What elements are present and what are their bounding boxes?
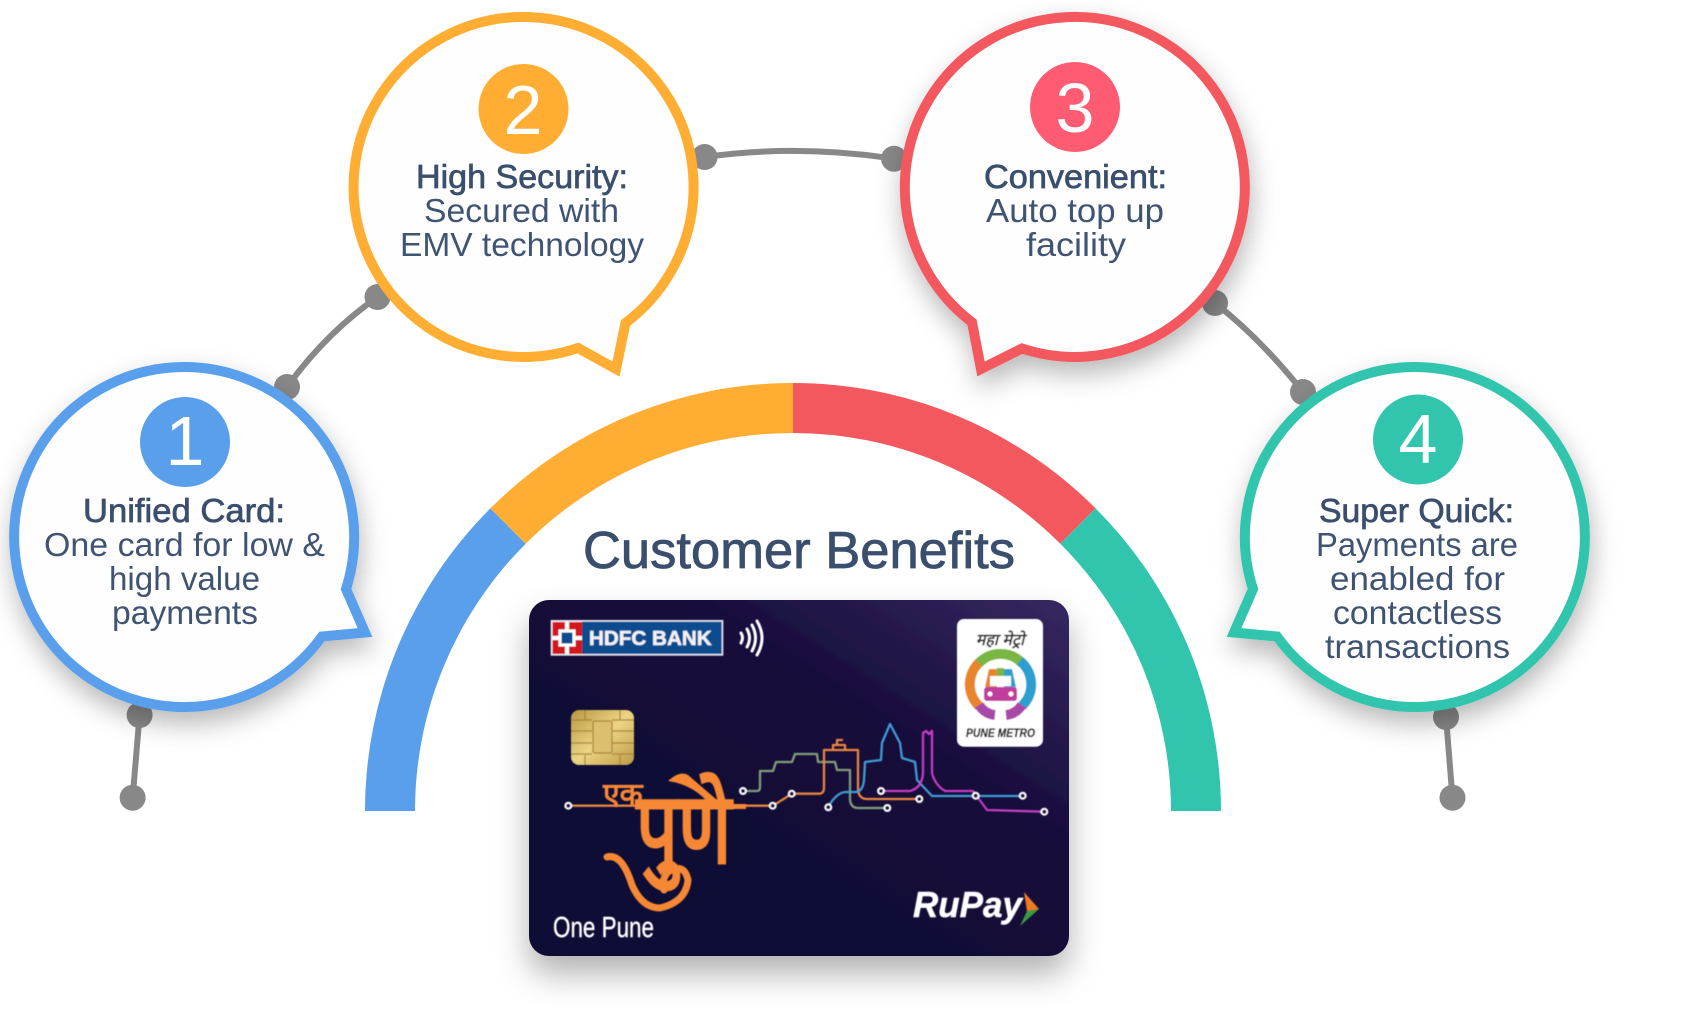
wordmark: ek pune [602,771,746,908]
panel: bubble 4 super quick: 4 [1399,400,1437,478]
metro line skyline [565,724,1047,815]
panel: bubble 1 unified card [14,367,365,707]
logo: Pune Metro tile: PUNE METRO [966,726,1036,740]
panel: bubble 3 convenient: 3 [1056,69,1094,147]
panel: bubble 1 unified card: high value [109,560,260,597]
panel: bubble 4 super quick: transactions [1325,628,1510,665]
panel: bubble 4 super quick [1234,367,1585,707]
wordmark: ek pune: एक [602,778,644,811]
logo: HDFC Bank [551,620,723,656]
icon: chip [571,710,634,765]
wordmark: ek pune: पुणे [634,771,734,891]
logo: HDFC Bank: HDFC BANK [589,628,712,650]
panel: bubble 4 super quick: Payments are [1316,526,1518,563]
semicircular four colour gauge [365,383,1221,811]
panel: bubble 4 super quick: enabled for [1330,560,1505,597]
label: One Pune: One Pune [553,912,654,944]
panel: bubble 1 unified card: One card for low & [44,526,325,563]
icon: contactless [741,621,762,655]
title: Customer Benefits [583,522,1015,580]
card: One Pune RuPay [529,600,1069,956]
panel: bubble 1 unified card: Unified Card: [83,492,285,529]
panel: bubble 4 super quick: contactless [1333,594,1502,631]
panel: bubble 3 convenient: Auto top up [986,192,1164,229]
panel: bubble 3 convenient: Convenient: [984,158,1167,195]
logo: Pune Metro tile: महा मेट्रो [976,630,1028,649]
panel: bubble 3 convenient [905,17,1245,369]
panel: bubble 1 unified card: payments [112,594,258,631]
panel: bubble 2 high security: EMV technology [400,226,644,263]
panel: bubble 4 super quick: Super Quick: [1319,492,1514,529]
panel: bubble 2 high security: 2 [504,71,542,149]
panel: bubble 2 high security: Secured with [424,192,619,229]
panel: bubble 1 unified card: 1 [166,402,204,480]
logo: Pune Metro tile [957,619,1043,747]
panel: bubble 3 convenient: facility [1026,226,1127,263]
panel: bubble 2 high security [354,17,694,369]
logo: RuPay: RuPay [913,884,1024,925]
panel: bubble 2 high security: High Security: [416,158,628,195]
connectors between bubbles [120,144,1466,811]
